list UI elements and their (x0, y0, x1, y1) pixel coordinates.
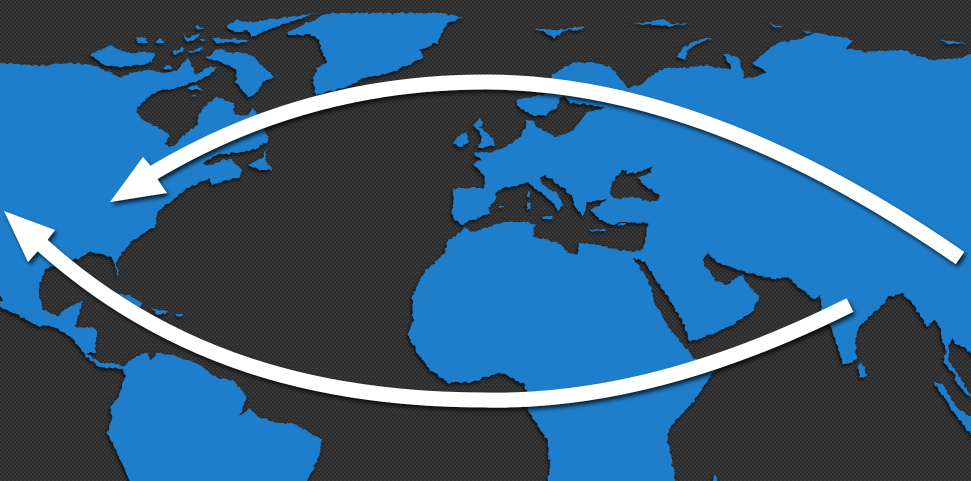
arrowhead (110, 157, 167, 202)
islands: Arctic Ocean (535, 19, 967, 60)
island: Greenland (288, 13, 463, 95)
arrow shaft (148, 82, 960, 258)
arrow: from India across Africa to Mexico (4, 211, 850, 400)
islands: British Isles (453, 118, 495, 148)
arrow: from Asia across Europe to North America (110, 82, 960, 258)
island: Sri Lanka (858, 362, 867, 377)
island: Sumatra (933, 382, 971, 442)
islands: Caribbean (115, 292, 182, 316)
landmass: the Americas (0, 58, 322, 481)
arrowhead (4, 211, 55, 262)
island: Madagascar tip (711, 474, 719, 481)
landmass: Africa and Eurasia (408, 33, 971, 481)
islands: Canadian Arctic (90, 13, 317, 170)
arrow shaft (42, 245, 850, 400)
islands: Mediterranean (499, 192, 627, 231)
